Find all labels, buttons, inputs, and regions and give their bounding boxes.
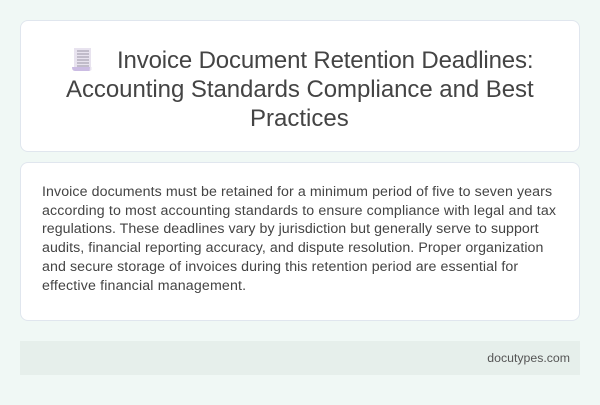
panel: title card: [20, 20, 580, 152]
icon: invoice receipt: [72, 48, 92, 71]
text block: description: according to most accounting standards to ensure compliance with legal and tax: [42, 203, 556, 219]
footer bar: [20, 341, 580, 375]
heading: Invoice Document Retention Deadlines:: [117, 47, 533, 74]
heading: Practices: [250, 105, 349, 132]
heading: Accounting Standards Compliance and Best: [66, 76, 534, 103]
footer text: docutypes.com: [487, 351, 570, 365]
heading: [66, 47, 534, 132]
text block: description: and secure storage of invoices during this retention period are essential for: [42, 259, 518, 275]
text block: description: audits, financial reporting accuracy, and dispute resolution. Proper organization: [42, 240, 543, 256]
text block: description: Invoice documents must be retained for a minimum period of five to seven years: [42, 184, 552, 200]
text block: description: effective financial management.: [42, 278, 246, 294]
text block: description: regulations. These deadlines vary by jurisdiction but generally serve to support: [42, 221, 539, 237]
panel: description card: [20, 162, 580, 321]
text block: description: [42, 184, 556, 294]
